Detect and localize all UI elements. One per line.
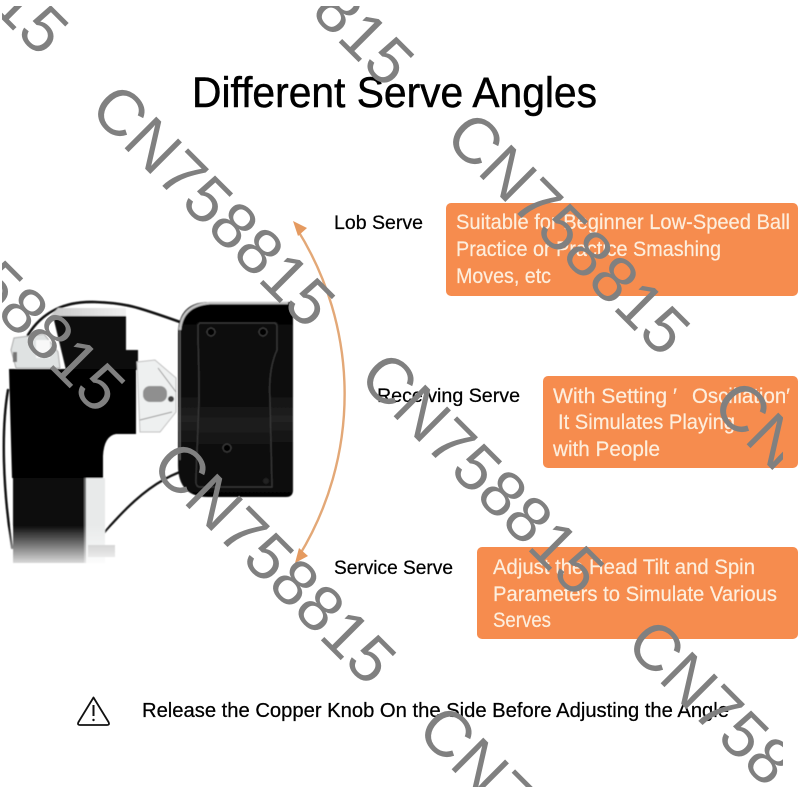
clear rotating joint — [137, 360, 176, 432]
callout: service serve: Serves — [493, 609, 551, 632]
label: service serve: Service Serve — [334, 557, 453, 579]
callout: lob serve — [446, 203, 798, 296]
callout: service serve — [477, 547, 798, 639]
machine head — [178, 302, 293, 497]
watermarks: CN758815 — [347, 338, 618, 609]
callout: lob serve: Moves, etc — [456, 265, 551, 288]
watermarks: CN758815 — [139, 427, 410, 698]
callout: receiving serve — [543, 376, 798, 468]
callout: service serve: Parameters to Simulate Various — [493, 583, 777, 606]
label: receiving serve: Receiving Serve — [377, 385, 520, 407]
callout: service serve: Adjust the Head Tilt and Spin — [493, 556, 755, 579]
watermarks: CN758815 — [433, 98, 704, 369]
callout: receiving serve: It Simulates Playing — [558, 411, 735, 434]
icon: warning triangle — [78, 698, 109, 725]
warning note: Release the Copper Knob On the Side Before Adjusting the Angle — [142, 700, 729, 722]
clear connector left — [11, 334, 60, 368]
machine body — [9, 308, 138, 563]
watermarks: CN758815 — [78, 70, 349, 341]
callout: lob serve: Practice or Practice Smashing — [456, 238, 721, 261]
label: lob serve: Lob Serve — [334, 212, 423, 234]
callout: receiving serve: Oscillation′ — [692, 385, 790, 408]
callout: lob serve: Suitable for Beginner Low-Speed Ball — [456, 211, 790, 234]
serve machine photo — [0, 302, 293, 570]
bottom fade — [0, 525, 140, 570]
head mounting plate — [196, 323, 277, 487]
callout: receiving serve: with People — [552, 438, 660, 461]
title: Different Serve Angles — [192, 69, 597, 117]
callout: receiving serve: With Setting ′ — [553, 385, 677, 408]
cables — [4, 302, 193, 557]
angle arc arrow — [293, 221, 345, 563]
